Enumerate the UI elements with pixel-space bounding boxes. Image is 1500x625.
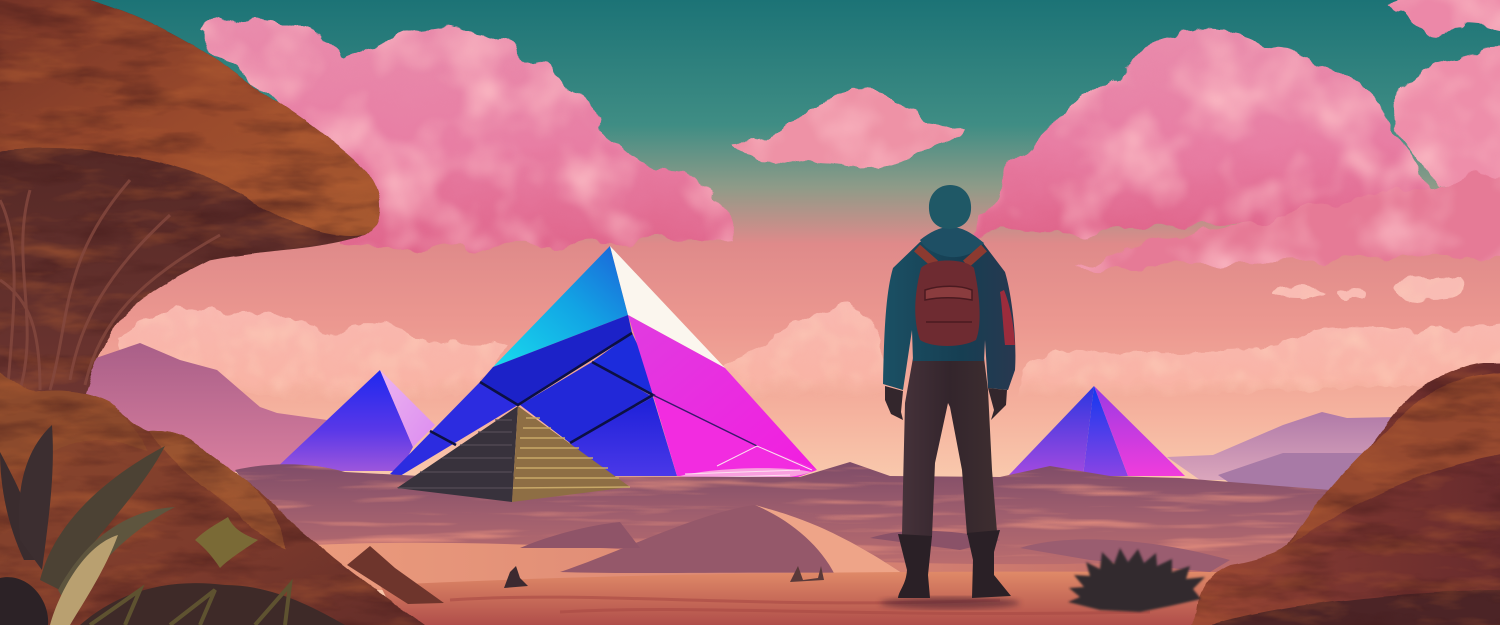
stepped stone pyramid [397, 406, 630, 502]
rock: right foreground [1190, 363, 1500, 625]
pyramid: small left [273, 370, 435, 471]
clouds: low horizon right [720, 276, 1500, 398]
dunes: foreground sand [380, 572, 1260, 625]
rock: left overhang [0, 0, 380, 395]
torso and arms [883, 238, 1015, 390]
boots [898, 530, 1011, 598]
cloud: top right corner [1388, 0, 1500, 36]
bush: spiky dark [1068, 548, 1205, 612]
hood [920, 227, 984, 257]
tiny figure on sand [504, 566, 528, 588]
dunes: sand plain [315, 543, 1240, 590]
legs [902, 358, 997, 537]
backpack straps [917, 248, 984, 264]
pyramid: large central neon [390, 246, 817, 481]
sleeve accent [1000, 290, 1015, 345]
cloud: lower right streak [1080, 177, 1500, 266]
cloud: small centre [732, 87, 960, 166]
ground shadow [880, 597, 1020, 609]
clouds: low horizon left [118, 308, 508, 402]
head: beanie [929, 185, 971, 229]
plant: agave foliage bottom left [0, 425, 345, 625]
cloud: right edge pink [1395, 47, 1500, 180]
rock: small foreground boulder [347, 546, 444, 604]
clouds: upper pink group [198, 0, 1500, 266]
cloud: large left pink [198, 18, 732, 250]
rock: overhang trunk ridges [0, 180, 220, 390]
hands [885, 386, 1007, 420]
pyramid: small right [1008, 386, 1185, 476]
rock: lower left mounds [0, 372, 425, 625]
mountains: distant [60, 343, 1397, 490]
tiny objects on sand [790, 566, 824, 582]
backpack [915, 260, 980, 346]
dunes: large central dune [520, 505, 1230, 575]
dunes: far band [235, 462, 1330, 570]
cloud: large right pink [975, 31, 1435, 234]
figure: traveller [880, 185, 1020, 609]
